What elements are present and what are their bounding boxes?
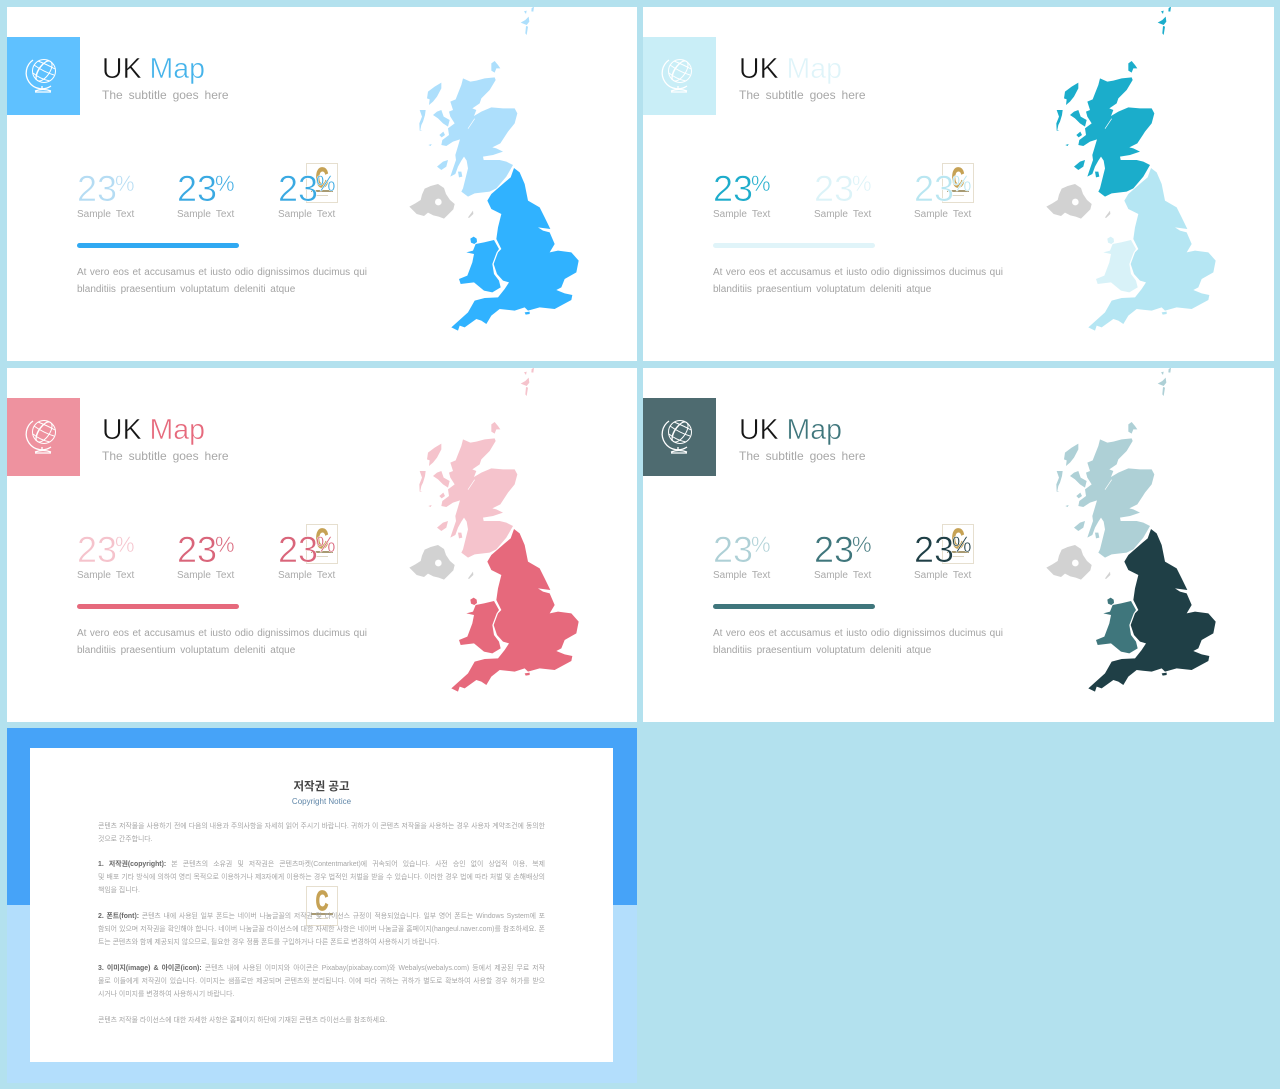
copyright body text: 트는 콘텐츠와 함께 제공되지 않으므로, 필요한 경우 정품 폰트를 구입하거나 다른 폰트로 변경하여 사용하시기 바랍니다.	[98, 939, 439, 946]
progress bar	[713, 604, 875, 609]
stat 1: Sample Text	[713, 209, 770, 220]
copyright body text: 함되어 있으며 저작권을 확인해야 합니다. 네이버 나눔글꼴 라이선스에 대한 자세한 사항은 네이버 나눔글꼴 홈페이지(hangeul.naver.com)를 참조하세요. 폰	[98, 926, 545, 933]
watermark badge	[306, 886, 338, 926]
stat 3: Sample Text	[278, 209, 335, 220]
subtitle: The subtitle goes here	[102, 449, 229, 463]
stat 2: 23	[177, 529, 217, 570]
stat 1: 23	[713, 529, 753, 570]
copyright notice card	[30, 748, 613, 1062]
stat 3: %	[952, 532, 972, 557]
body text: blanditiis praesentium voluptatum deleniti atque	[713, 284, 931, 295]
copyright body text: 물로 이들에게 저작권이 있습니다. 이미지는 샘플로만 제공되며 콘텐츠와 분리됩니다. 이에 따라 귀하는 귀하가 별도로 확보하여 사용할 경우 허가를 받으	[98, 978, 545, 985]
stat 3: 23	[914, 168, 954, 209]
stat 2: 23	[814, 529, 854, 570]
stat 3: %	[952, 171, 972, 196]
body text: At vero eos et accusamus et iusto odio dignissimos ducimus qui	[77, 267, 367, 278]
stat 1: Sample Text	[713, 570, 770, 581]
body text	[77, 628, 367, 656]
stat 3	[278, 529, 336, 581]
stat 3: Sample Text	[914, 209, 971, 220]
body text	[77, 267, 367, 295]
copyright body text: 1. 저작권(copyright): 본 콘텐츠의 소유권 및 저작권은 콘텐츠마켓(Contentmarket)에 귀속되어 있습니다. 사전 승인 없이 상업적 이용, 복제	[98, 861, 545, 868]
panel: UK map, blue, England highlighted	[7, 7, 637, 361]
panel: copyright notice	[7, 728, 637, 1083]
body text: At vero eos et accusamus et iusto odio dignissimos ducimus qui	[77, 628, 367, 639]
stat 2: 23	[814, 168, 854, 209]
copyright body text: 책임을 집니다.	[98, 887, 140, 894]
watermark badge	[306, 163, 338, 203]
stat 3: Sample Text	[914, 570, 971, 581]
stat 1: %	[115, 532, 135, 557]
stat 1	[713, 529, 771, 581]
panel: UK map, pink, England highlighted	[7, 368, 637, 722]
copyright heading: 저작권 공고	[293, 781, 350, 793]
title: UK Map	[102, 414, 205, 446]
stat 1: 23	[713, 168, 753, 209]
body text: blanditiis praesentium voluptatum deleniti atque	[77, 645, 295, 656]
stat 3	[914, 168, 972, 220]
icon: globe on slate square	[643, 398, 716, 476]
map of the UK	[410, 368, 579, 692]
body text: At vero eos et accusamus et iusto odio dignissimos ducimus qui	[713, 267, 1003, 278]
stat 1	[713, 168, 771, 220]
subtitle: The subtitle goes here	[102, 88, 229, 102]
stat 3: Sample Text	[278, 570, 335, 581]
watermark badge	[942, 163, 974, 203]
icon: globe on blue square	[7, 37, 80, 115]
stat 2: %	[852, 532, 872, 557]
panel: UK map, dark teal, England highlighted	[643, 368, 1274, 722]
map of the UK	[1046, 368, 1216, 692]
title: UK Map	[739, 414, 842, 446]
body text	[713, 628, 1003, 656]
stat 3: %	[316, 532, 336, 557]
copyright subheading: Copyright Notice	[292, 797, 351, 806]
copyright body text: 3. 이미지(image) & 아이콘(icon): 콘텐츠 내에 사용된 이미지와 아이콘은 Pixabay(pixabay.com)와 Webalys(webalys.com) 등에서 제공된 무료 저작	[98, 965, 545, 972]
stat 3	[914, 529, 972, 581]
stat 2: %	[215, 532, 235, 557]
stat 2	[814, 168, 872, 220]
copyright body text: 및 배포 기타 방식에 의하여 영리 목적으로 이용하거나 제3자에게 이용하는 경우 법적인 처벌을 받을 수 있습니다. 이러한 경우 법에 따라 처벌 및 손해배상의	[98, 874, 545, 881]
icon: globe on pale square	[643, 37, 716, 115]
copyright body text: 콘텐츠 저작물을 사용하기 전에 다음의 내용과 주의사항을 자세히 읽어 주시기 바랍니다. 귀하가 이 콘텐츠 저작물을 사용하는 경우 사용자 계약조건에 동의한	[98, 823, 545, 830]
body text: blanditiis praesentium voluptatum deleniti atque	[713, 645, 931, 656]
copyright body text: 2. 폰트(font): 콘텐츠 내에 사용된 일부 폰트는 네이버 나눔글꼴의 저작권 및 라이선스 규정이 적용되었습니다. 일부 영어 폰트는 Windows System에 포	[98, 913, 545, 920]
icon: globe on pink square	[7, 398, 80, 476]
copyright body text: 것으로 간주합니다.	[98, 836, 153, 843]
copyright body text	[98, 822, 545, 1024]
progress bar	[713, 243, 875, 248]
stat 2	[814, 529, 872, 581]
subtitle: The subtitle goes here	[739, 88, 866, 102]
stat 1: %	[115, 171, 135, 196]
stat 1: 23	[77, 529, 117, 570]
stat 2: Sample Text	[177, 209, 234, 220]
title: UK Map	[102, 53, 205, 85]
map of the UK	[1046, 7, 1216, 330]
stat 2	[177, 529, 235, 581]
stat 3: %	[316, 171, 336, 196]
watermark badge	[306, 524, 338, 564]
panel: UK map, teal, Scotland highlighted	[643, 7, 1274, 361]
stat 3	[278, 168, 336, 220]
stat 3: 23	[278, 529, 318, 570]
body text: At vero eos et accusamus et iusto odio dignissimos ducimus qui	[713, 628, 1003, 639]
stat 1	[77, 529, 135, 581]
stat 2: Sample Text	[814, 570, 871, 581]
stat 3: 23	[278, 168, 318, 209]
stat 1: Sample Text	[77, 570, 134, 581]
stat 2: Sample Text	[814, 209, 871, 220]
stat 1: 23	[77, 168, 117, 209]
stat 2	[177, 168, 235, 220]
progress bar	[77, 604, 239, 609]
stat 2: 23	[177, 168, 217, 209]
stat 3: 23	[914, 529, 954, 570]
stat 1	[77, 168, 135, 220]
stat 1: %	[751, 171, 771, 196]
body text	[713, 267, 1003, 295]
title: UK Map	[739, 53, 842, 85]
subtitle: The subtitle goes here	[739, 449, 866, 463]
copyright body text: 콘텐츠 저작물 라이선스에 대한 자세한 사항은 홈페이지 하단에 기재된 콘텐츠 라이선스를 참조하세요.	[98, 1017, 387, 1024]
body text: blanditiis praesentium voluptatum deleniti atque	[77, 284, 295, 295]
stat 1: Sample Text	[77, 209, 134, 220]
watermark badge	[942, 524, 974, 564]
stat 2: %	[852, 171, 872, 196]
stat 2: Sample Text	[177, 570, 234, 581]
progress bar	[77, 243, 239, 248]
map of the UK	[410, 7, 579, 331]
stat 2: %	[215, 171, 235, 196]
copyright body text: 시거나 이미지를 변경하여 사용하시기 바랍니다.	[98, 991, 234, 998]
stat 1: %	[751, 532, 771, 557]
